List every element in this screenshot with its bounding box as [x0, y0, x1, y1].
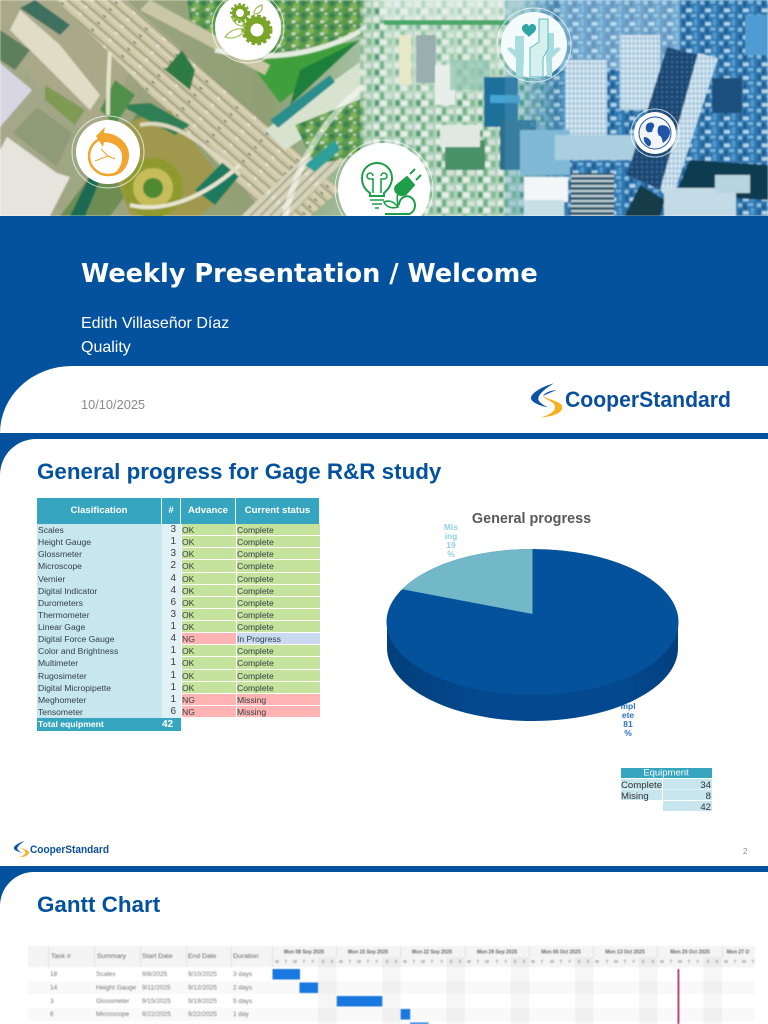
gantt week headers: Mon 08 Sep 2025	[284, 950, 324, 956]
gantt day letters: T	[688, 959, 691, 964]
table: equipment classification status: Durometers	[38, 598, 83, 608]
gantt day letters: T	[413, 959, 416, 964]
icon: clock with arrow	[72, 116, 144, 188]
table: equipment classification status: Complete	[237, 586, 274, 596]
gantt day letters: T	[367, 959, 370, 964]
icon: globe	[631, 109, 679, 157]
gantt day letters: T	[496, 959, 499, 964]
slide 2 top stripe	[0, 433, 768, 439]
gantt day letters: S	[330, 959, 334, 964]
pie side wall	[387, 622, 678, 721]
gantt day letters: W	[485, 959, 490, 964]
gantt row: Height Gauge: Height Gauge	[96, 984, 136, 992]
table: equipment classification status: Complete	[237, 622, 274, 632]
gantt week headers: Mon 13 Oct 2025	[605, 950, 645, 956]
data label: Complete 81%: %	[624, 728, 632, 738]
gantt day letters: M	[660, 959, 664, 964]
table: equipment classification status: Meghometer	[38, 695, 86, 705]
gantt day letters: F	[697, 959, 700, 964]
table: equipment classification status: In Progress	[237, 634, 281, 644]
table: equipment classification status: Vernier	[38, 574, 65, 584]
gantt week headers: Mon 06 Oct 2025	[541, 950, 581, 956]
table: equipment classification status: Rugosimeter	[38, 670, 87, 680]
table: equipment classification status: 3	[170, 524, 176, 535]
logo: Cooper Standard large	[531, 383, 731, 418]
table: equipment classification status: NG	[182, 634, 195, 644]
table: equipment classification status: 4	[170, 585, 176, 596]
table: equipment classification status: OK	[182, 658, 194, 668]
gantt weekend columns	[318, 957, 722, 1024]
table: equipment classification status: Advance	[188, 505, 228, 516]
table: equipment classification status: Complete	[237, 549, 274, 559]
hero photo: aerial city with highways and icons	[0, 0, 768, 216]
table: equipment classification status: Complete	[237, 683, 274, 693]
gantt row: Height Gauge: 9/11/2025	[142, 984, 171, 992]
gantt day letters: S	[321, 959, 325, 964]
gantt row: Scales: 18	[50, 971, 58, 978]
table: equipment summary: 34	[700, 780, 712, 791]
gantt row: Height Gauge: 9/12/2025	[188, 984, 217, 992]
gantt row: Glossmeter: 9/15/2025	[142, 998, 171, 1005]
table: equipment classification status: Current status	[245, 505, 310, 516]
table: equipment classification status: Complete	[237, 646, 274, 656]
table: equipment classification status: OK	[182, 525, 194, 535]
table: equipment classification status: Glossmeter	[38, 549, 82, 559]
table: equipment classification status: 1	[170, 694, 176, 705]
table: equipment summary	[621, 768, 712, 813]
slide 2 blue corner	[0, 438, 36, 474]
data label: Complete 81%: ete	[622, 710, 634, 720]
gantt day letters: M	[403, 959, 407, 964]
table: equipment classification status: OK	[182, 574, 194, 584]
gantt row: Scales	[50, 969, 300, 980]
table: equipment classification status: OK	[182, 549, 194, 559]
slide 3 top stripe	[0, 866, 768, 872]
gantt day letters: F	[441, 959, 444, 964]
gantt day letters: S	[651, 959, 655, 964]
gantt row: Height Gauge	[50, 982, 318, 993]
table: equipment classification status: Digital Indicator	[38, 586, 97, 596]
data label: Missing 19%: %	[447, 549, 455, 559]
gantt day letters: S	[394, 959, 398, 964]
table: equipment classification status: Color and Brightness	[38, 646, 118, 656]
table: equipment summary: Mising	[621, 791, 649, 802]
table: equipment classification status: 2	[170, 560, 176, 571]
gantt row: Glossmeter: 3	[50, 998, 54, 1005]
gantt day letters: M	[531, 959, 535, 964]
gantt column headers: Summary	[97, 953, 127, 960]
slide 3 white panel	[0, 872, 768, 1024]
gantt row: Scales: Scales	[96, 971, 116, 978]
gantt day letters: W	[614, 959, 619, 964]
gantt day letters: W	[357, 959, 362, 964]
gantt row: Glossmeter	[50, 996, 382, 1006]
pie slice: Missing	[402, 549, 532, 614]
gantt day letters: T	[606, 959, 609, 964]
table: equipment summary: Complete	[621, 780, 662, 791]
gantt day letters: W	[421, 959, 426, 964]
chart: Gantt	[28, 946, 755, 1024]
gantt row: Glossmeter: Glossmeter	[96, 998, 130, 1005]
gantt day letters: T	[670, 959, 673, 964]
table: equipment classification status: Complete	[237, 537, 274, 547]
gantt day letters: S	[641, 959, 645, 964]
table: equipment classification status: Complete	[237, 610, 274, 620]
gantt row: Microscope	[50, 1009, 410, 1020]
table: equipment classification status: Total equipment	[38, 719, 104, 729]
table: equipment classification status: OK	[182, 586, 194, 596]
gantt column headers: Task #	[51, 953, 71, 960]
gantt week headers: Mon 29 Sep 2025	[477, 950, 517, 956]
table: equipment classification status: Tensometer	[38, 707, 83, 717]
gantt day letters: T	[303, 959, 306, 964]
gantt day letters: W	[293, 959, 298, 964]
gantt day letters: S	[385, 959, 389, 964]
table: equipment classification status: Digital Force Gauge	[38, 634, 114, 644]
table: equipment classification status: #	[168, 505, 174, 516]
gantt day letters: S	[577, 959, 581, 964]
slide 3 heading: Gantt Chart	[37, 892, 160, 917]
table: equipment classification status: 6	[170, 706, 176, 717]
table: equipment classification status: 1	[170, 536, 176, 547]
table: equipment classification status: Complete	[237, 658, 274, 668]
date: 10/10/2025	[81, 397, 145, 412]
table: equipment classification status: NG	[182, 707, 195, 717]
gantt row: Microscope: 6	[50, 1011, 54, 1018]
table: equipment classification status: Complete	[237, 574, 274, 584]
gantt day letters: T	[477, 959, 480, 964]
table: equipment classification status: 1	[170, 657, 176, 668]
table: equipment classification status	[37, 498, 320, 731]
table: equipment classification status: OK	[182, 622, 194, 632]
table: equipment classification status: OK	[182, 610, 194, 620]
table: equipment classification status: Clasification	[70, 505, 128, 516]
table: equipment summary: 8	[706, 791, 711, 802]
data label: Missing 19%: 19	[446, 540, 456, 550]
department: Quality	[81, 339, 131, 356]
table: equipment classification status: 4	[170, 633, 176, 644]
gantt day letters: F	[569, 959, 572, 964]
page number: 2	[743, 847, 747, 856]
gantt header band	[28, 946, 755, 967]
gantt alternate row shading	[28, 981, 755, 1021]
gantt row: Height Gauge: 2 days	[233, 984, 253, 992]
table: equipment classification status: Complete	[237, 561, 274, 571]
gantt day letters	[275, 959, 755, 964]
title: Weekly Presentation / Welcome	[81, 259, 538, 289]
pie slice: Complete	[386, 549, 678, 695]
table: equipment classification status: 42	[162, 719, 173, 730]
table: equipment classification status: OK	[182, 670, 194, 680]
gantt day letters: M	[595, 959, 599, 964]
gantt day letters: W	[550, 959, 555, 964]
gantt day letters: T	[431, 959, 434, 964]
gantt row: Scales: 9/10/2025	[188, 971, 217, 978]
table: equipment classification status: OK	[182, 683, 194, 693]
table: equipment summary: Equipment	[643, 768, 689, 778]
logo: Cooper Standard small	[14, 841, 109, 858]
table: equipment classification status: Height Gauge	[38, 537, 91, 547]
data label: Missing 19%: Mis	[444, 522, 458, 532]
table: equipment classification status: Complete	[237, 525, 274, 535]
gantt column headers: Start Date	[142, 953, 173, 960]
icon: hands and heart	[497, 8, 571, 82]
chart: General progress 3D pie	[386, 511, 678, 738]
gantt row: Glossmeter: 5 days	[233, 998, 253, 1005]
gantt column headers: Duration	[233, 953, 259, 960]
title slide white footer panel	[0, 366, 768, 433]
table: equipment classification status: 1	[170, 670, 176, 680]
slide 2 heading: General progress for Gage R&R study	[37, 459, 441, 484]
gantt day letters: T	[752, 959, 755, 964]
gantt day letters: M	[275, 959, 279, 964]
gantt day letters: F	[312, 959, 315, 964]
table: equipment classification status: 4	[170, 572, 176, 584]
title slide blue band	[0, 216, 768, 433]
table: equipment classification status: 1	[170, 621, 176, 632]
table: equipment classification status: 6	[170, 597, 176, 608]
gantt today marker	[678, 969, 679, 1024]
gantt day letters: W	[678, 959, 683, 964]
data label: Complete 81%: mpl	[620, 701, 636, 711]
table: equipment classification status: Microscope	[38, 561, 82, 571]
gantt day letters: S	[513, 959, 517, 964]
gantt day letters: W	[742, 959, 747, 964]
table: equipment classification status: OK	[182, 561, 194, 571]
table: equipment classification status: Missing	[237, 707, 266, 717]
slide 3 blue corner	[0, 871, 34, 905]
table: equipment classification status: OK	[182, 646, 194, 656]
gantt day letters: T	[349, 959, 352, 964]
table: equipment classification status: 1	[170, 682, 176, 693]
gantt day letters: F	[505, 959, 508, 964]
gantt day letters: S	[522, 959, 526, 964]
gantt row: Glossmeter: 9/19/2025	[188, 998, 217, 1005]
table: equipment classification status: OK	[182, 537, 194, 547]
table: equipment classification status: 3	[170, 609, 176, 620]
table: equipment classification status: Complete	[237, 598, 274, 608]
gantt week headers	[284, 950, 749, 956]
gantt day letters: S	[449, 959, 453, 964]
gantt week headers: Mon 20 Oct 2025	[670, 950, 710, 956]
gantt column separators	[48, 946, 723, 967]
data label: Complete 81%: Co	[622, 692, 634, 702]
gantt day letters: M	[339, 959, 343, 964]
gantt day letters: M	[467, 959, 471, 964]
gantt day letters: S	[458, 959, 462, 964]
table: equipment classification status: Digital Micropipette	[38, 683, 111, 693]
gantt day letters: T	[541, 959, 544, 964]
table: equipment classification status: Scales	[38, 525, 64, 535]
gantt row: Scales: 3 days	[233, 971, 253, 978]
gantt row: Microscope: Microscope	[96, 1011, 130, 1018]
table: equipment classification status: 3	[170, 548, 176, 559]
data label: Missing 19%: ing	[445, 531, 457, 541]
table: equipment classification status: Complete	[237, 670, 274, 680]
gantt day letters: S	[586, 959, 590, 964]
gantt week headers: Mon 22 Sep 2025	[412, 950, 452, 956]
presenter name: Edith Villaseñor Díaz	[81, 315, 229, 332]
gantt day letters: F	[633, 959, 636, 964]
gantt day letters: T	[560, 959, 563, 964]
table: equipment summary: 42	[700, 802, 711, 813]
table: equipment classification status: Multimeter	[38, 658, 78, 668]
table: equipment classification status: Linear Gage	[38, 622, 85, 632]
gantt day letters: M	[724, 959, 728, 964]
gantt row: Height Gauge: 14	[50, 984, 58, 992]
gantt row: Microscope: 9/22/2025	[188, 1011, 217, 1018]
gantt week headers: Mon 27 O	[727, 950, 749, 956]
slide 2 white panel	[0, 439, 768, 866]
gantt column headers: End Date	[188, 953, 217, 960]
gantt day letters: T	[285, 959, 288, 964]
table: equipment classification status: Thermometer	[38, 610, 90, 620]
icon: gears	[212, 0, 284, 63]
table: equipment classification status: OK	[182, 598, 194, 608]
gantt row: Microscope: 1 day	[233, 1011, 250, 1018]
icon: light bulb and plug	[335, 140, 433, 238]
gantt day letters: F	[376, 959, 379, 964]
gantt day letters: S	[715, 959, 719, 964]
gantt partial next bar	[410, 1022, 428, 1024]
data label: Complete 81%: 81	[623, 719, 633, 729]
table: equipment classification status: NG	[182, 695, 195, 705]
gantt week headers: Mon 15 Sep 2025	[348, 950, 388, 956]
chart title: General progress	[472, 511, 591, 527]
logo: Cooper Standard large: CooperStandard	[565, 387, 731, 412]
gantt day letters: S	[706, 959, 710, 964]
table: equipment classification status: Missing	[237, 695, 266, 705]
table: equipment classification status: 1	[170, 645, 176, 656]
gantt row: Scales: 9/8/2025	[142, 971, 168, 978]
gantt day letters: T	[624, 959, 627, 964]
gantt row: Microscope: 9/22/2025	[142, 1011, 171, 1018]
gantt day letters: T	[734, 959, 737, 964]
gantt column headers	[51, 953, 259, 960]
